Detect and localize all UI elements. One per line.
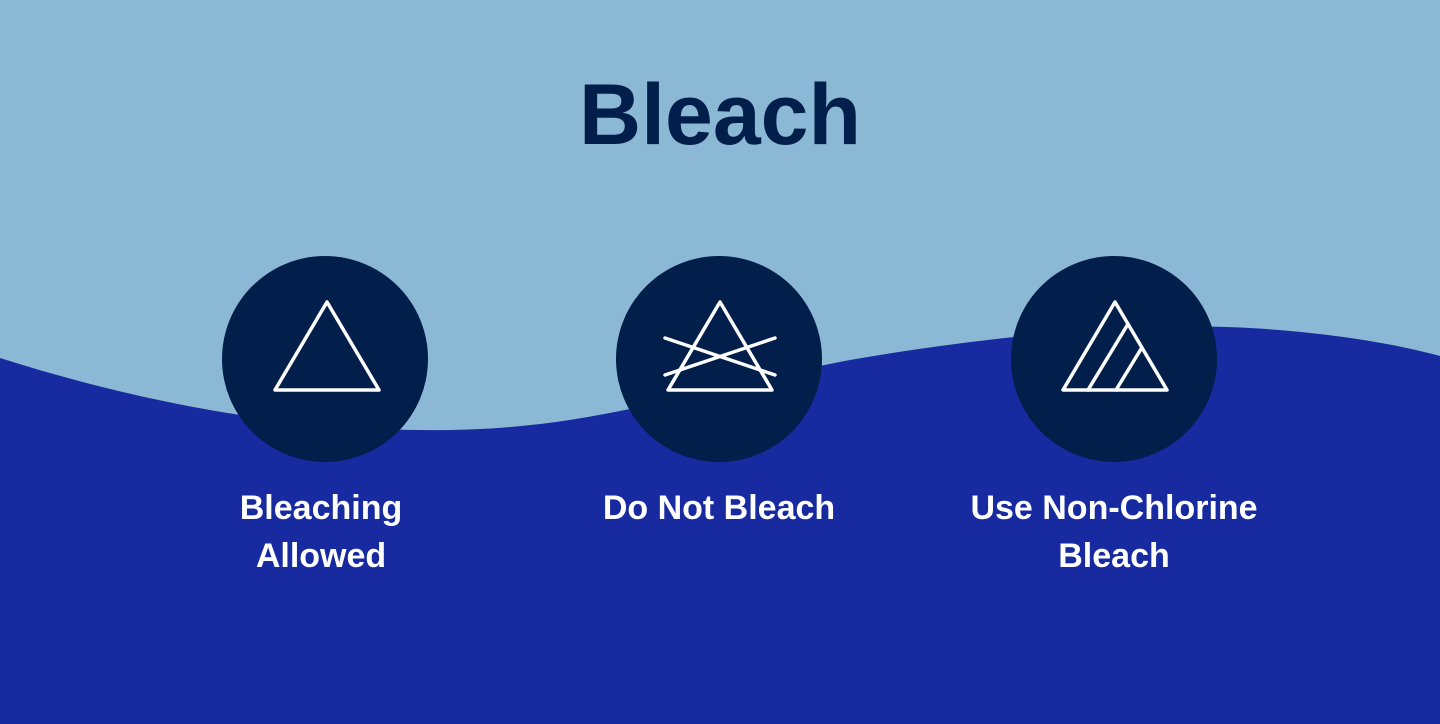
- title: Bleach: [579, 67, 861, 163]
- icon: non-chlorine bleach: [1011, 256, 1217, 462]
- label: bleaching allowed: Bleaching: [240, 489, 402, 527]
- label: bleaching allowed: Allowed: [256, 537, 386, 575]
- icon: do not bleach: [616, 256, 822, 462]
- label: non-chlorine bleach: Bleach: [1058, 537, 1170, 575]
- label: non-chlorine bleach: [970, 489, 1258, 575]
- label: non-chlorine bleach: Use Non-Chlorine: [970, 489, 1258, 527]
- icon: bleaching allowed: [222, 256, 428, 462]
- label: bleaching allowed: [240, 489, 402, 575]
- label: do not bleach: Do Not Bleach: [603, 489, 835, 527]
